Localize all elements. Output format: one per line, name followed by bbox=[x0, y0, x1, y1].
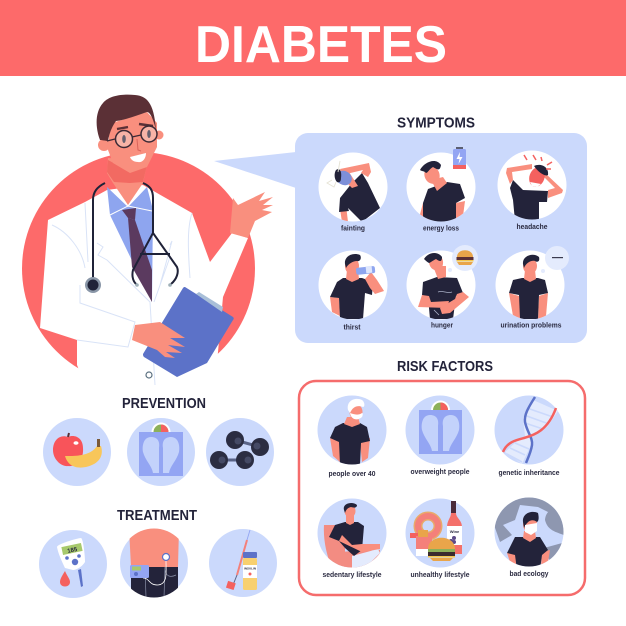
prevention heading: PREVENTION bbox=[122, 395, 206, 412]
icon: dumbbells bbox=[206, 418, 274, 486]
label: overweight people bbox=[410, 467, 470, 476]
icon: wine bottle: Wine bbox=[450, 529, 460, 534]
risk: sedentary lifestyle bbox=[318, 498, 386, 579]
label: thirst bbox=[344, 322, 361, 332]
icon: apple and banana bbox=[43, 418, 111, 486]
label: urination problems bbox=[500, 320, 562, 330]
symptom: urination problems bbox=[496, 246, 569, 330]
icon: syringe and insulin vial: INSULIN bbox=[244, 566, 256, 570]
label: fainting bbox=[341, 224, 365, 232]
icon: glucose meter: 185 bbox=[67, 547, 79, 555]
icon: weight scale bbox=[127, 418, 195, 486]
icon: burger bbox=[428, 538, 455, 561]
label: energy loss bbox=[423, 224, 459, 232]
symptom: thirst bbox=[318, 250, 388, 332]
treatment heading: TREATMENT bbox=[117, 507, 197, 524]
header banner bbox=[0, 0, 626, 76]
panel: risk factors bbox=[299, 381, 585, 595]
label: sedentary lifestyle bbox=[322, 570, 382, 579]
symptom: energy loss bbox=[406, 147, 476, 232]
icon: syringe and insulin vial bbox=[209, 529, 277, 597]
panel: treatment icons bbox=[39, 528, 277, 600]
icon: donut bbox=[418, 516, 438, 536]
label: bad ecology bbox=[510, 569, 549, 578]
label: hunger bbox=[431, 320, 453, 330]
label: unhealthy lifestyle bbox=[410, 570, 470, 579]
risk: overweight people bbox=[406, 396, 474, 476]
risk: bad ecology bbox=[494, 498, 564, 578]
doctor illustration bbox=[22, 95, 273, 385]
symptoms heading: SYMPTOMS bbox=[397, 114, 475, 132]
label: genetic inheritance bbox=[498, 468, 560, 477]
icon: fries bbox=[410, 530, 435, 556]
icon: glucose meter bbox=[39, 530, 107, 598]
symptom: hunger bbox=[406, 245, 478, 330]
title: DIABETES bbox=[195, 16, 447, 74]
risk: people over 40 bbox=[318, 396, 386, 478]
risk: unhealthy lifestyle bbox=[406, 498, 474, 579]
panel: symptoms bbox=[295, 133, 587, 343]
label: people over 40 bbox=[328, 469, 376, 478]
icon: insulin pump on belly bbox=[120, 528, 188, 600]
symptom: headache bbox=[498, 150, 566, 231]
speech bubble tail bbox=[214, 152, 296, 188]
icon: battery bbox=[453, 147, 466, 169]
panel: prevention icons bbox=[43, 418, 274, 486]
symptom: fainting bbox=[318, 152, 388, 232]
icon: burger thought bubble bbox=[448, 245, 478, 272]
risk: genetic inheritance bbox=[494, 396, 564, 477]
icon: thought bubble bbox=[541, 246, 569, 273]
label: headache bbox=[516, 222, 548, 231]
risk factors heading: RISK FACTORS bbox=[397, 358, 493, 375]
